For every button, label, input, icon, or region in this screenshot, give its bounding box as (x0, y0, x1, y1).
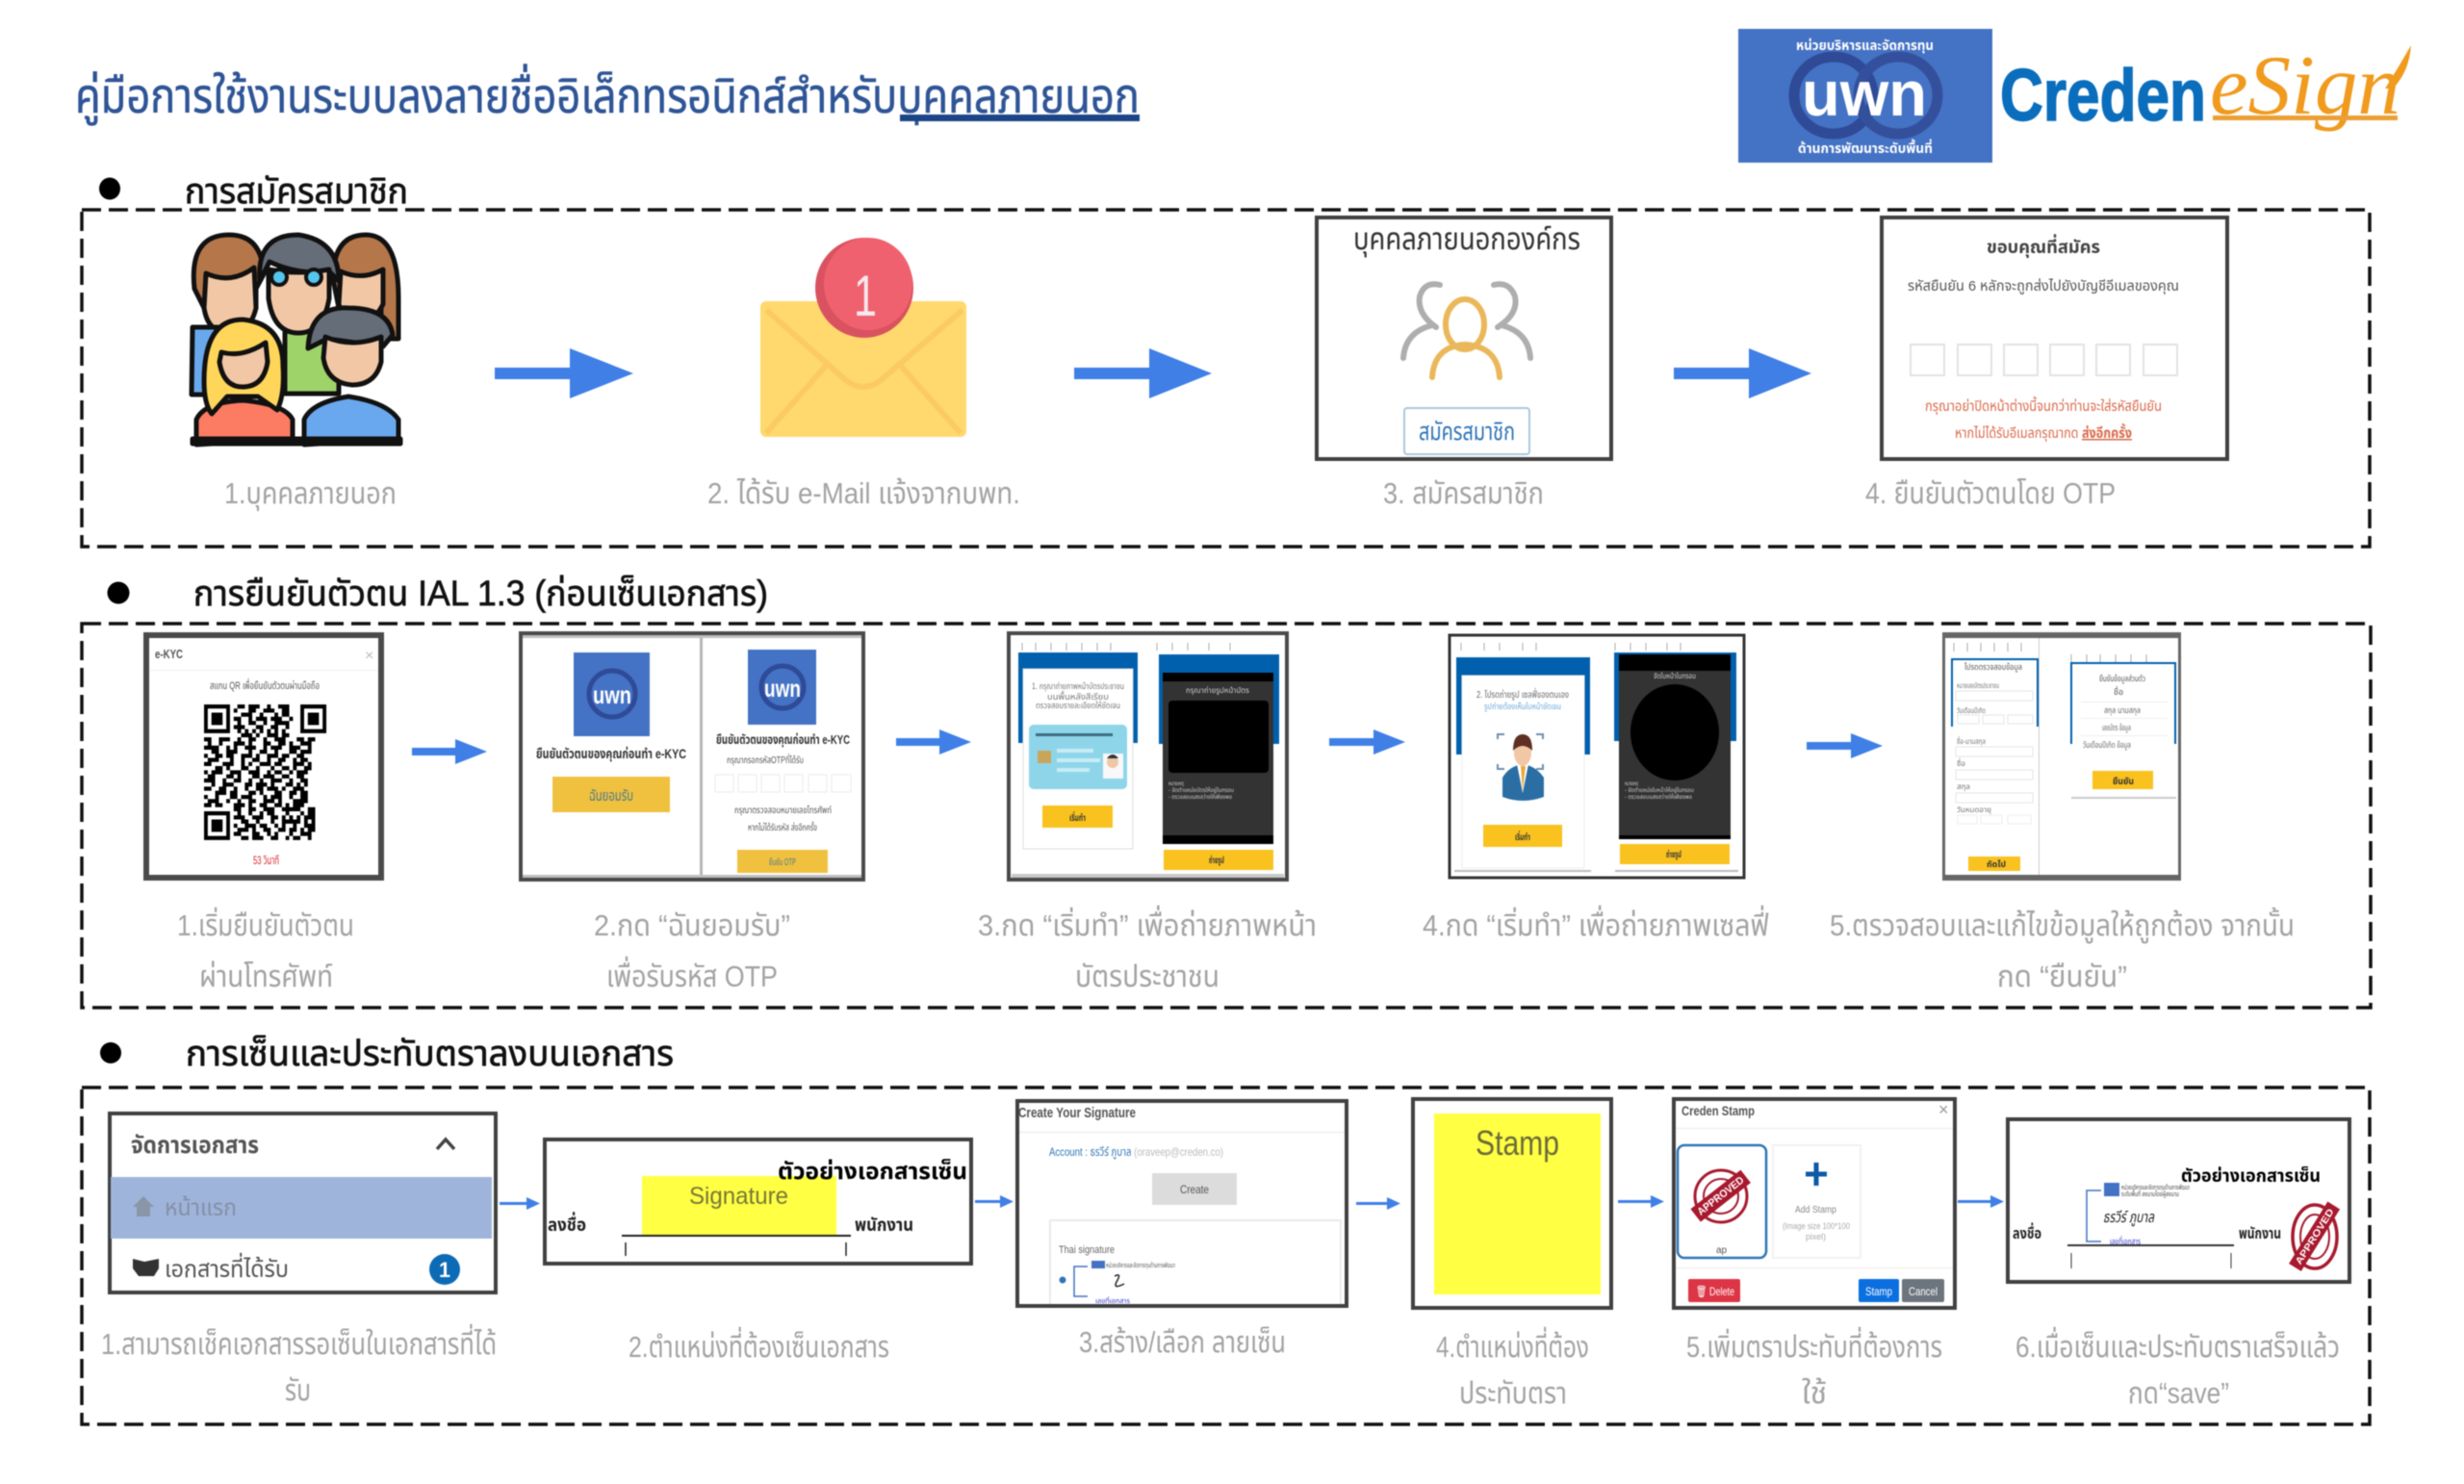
logo: Creden eSign: eSign (2210, 39, 2400, 133)
card: accept terms and OTP: ยืนยันตัวตนของคุณก่อนทำ e-KYC (716, 732, 850, 747)
stamp option (1678, 1145, 1766, 1258)
card: document menu: เอกสารที่ได้รับ (165, 1252, 289, 1283)
caption: 4. ยืนยันตัวตนโดย OTP (1865, 476, 2116, 510)
card: e-KYC QR: × (365, 648, 373, 664)
confirm screen (2071, 663, 2176, 799)
logo: UWN: หน่วยบริหารและจัดการทุน (1796, 38, 1934, 54)
caption (101, 1323, 497, 1407)
icon: envelope with notification (760, 238, 966, 437)
right phone screen: หมายเหตุ (1625, 781, 1638, 787)
card: signature position: ลงชื่อ (548, 1212, 586, 1236)
confirm screen: วันเดือนปีเกิด ข้อมูล (2083, 740, 2131, 751)
arrow (1074, 348, 1212, 398)
QR code (204, 704, 326, 840)
card: create signature: Create Your Signature (1018, 1105, 1136, 1121)
card: create signature (1017, 1101, 1347, 1306)
form screen: ถัดไป (1987, 859, 2006, 869)
arrow (1807, 733, 1883, 758)
arrow (1674, 348, 1811, 398)
right phone screen: - ตรวจสอบแสงสว่างให้เพียงพอ (1625, 794, 1693, 801)
left phone screen: รูปถ่ายต้องเห็นใบหน้าชัดเจน (1484, 702, 1561, 712)
form screen: ชื่อ (1957, 757, 1965, 768)
caption: 1.เริ่มยืนยันตัวตน (177, 907, 354, 942)
left phone screen: บนพื้นหลังสีเรียบ (1047, 690, 1109, 702)
card: signed and stamped document: ธรวีร์ ภูบาล (2103, 1210, 2155, 1227)
right phone screen: หมายเหตุ (1168, 781, 1184, 787)
arrow (1618, 1195, 1664, 1208)
card: OTP verification: ขอบคุณที่สมัคร (1987, 234, 2100, 258)
left phone screen: เริ่มทำ (1069, 811, 1086, 824)
mini logo (574, 652, 650, 736)
caption (177, 907, 354, 993)
card: document menu: หน้าแรก (165, 1195, 237, 1221)
section heading: identity verification: การยืนยันตัวตน IAL 1.3 (ก่อนเซ็นเอกสาร) (193, 574, 768, 613)
card: sign up (1317, 217, 1611, 459)
caption: ใช้ (1802, 1376, 1827, 1410)
card: OTP verification: หากไม่ได้รับอีเมลกรุณากด ส่งอีกครั้ง (1955, 423, 2132, 442)
icon: group of people (192, 235, 400, 445)
right phone screen: จัดใบหน้าในกรอบ (1654, 671, 1696, 680)
button: stamp (1859, 1279, 1899, 1302)
button (1404, 408, 1529, 454)
form screen: วันเดือนปีเกิด (1957, 705, 1986, 715)
title: คู่มือการใช้งานระบบลงลายชื่ออิเล็กทรอนิกส์สำหรับบุคคลภายนอก (75, 64, 1140, 125)
confirm screen: ยืนยันข้อมูลส่วนตัว (2099, 674, 2145, 684)
logo: UWN: uwn (1802, 58, 1927, 129)
card: OTP verification: กรุณาอย่าปิดหน้าต่างนี้จนกว่าท่านจะใส่รหัสยืนยัน (1925, 396, 2162, 415)
caption: 5.เพิ่มตราประทับที่ต้องการ (1686, 1326, 1942, 1364)
confirm screen: ยืนยัน (2113, 776, 2134, 787)
form screen: โปรดตรวจสอบข้อมูล (1964, 662, 2022, 673)
card: signed and stamped document: ตัวอย่างเอกสารเซ็น (2181, 1164, 2321, 1187)
card: signed and stamped document: ระดับพื้นที่ ลงนามโดยผู้ลงนาม (2121, 1189, 2179, 1198)
left phone screen: 2. โปรดถ่ายรูป เซลฟี่ของตนเอง (1476, 687, 1569, 701)
arrow (412, 739, 487, 764)
panel: identity verification (82, 624, 2371, 1008)
confirm screen: สกุล นามสกุล (2104, 705, 2141, 715)
card: accept terms and OTP (521, 633, 863, 880)
card: signature position (545, 1139, 971, 1264)
panel: membership (82, 210, 2370, 547)
button (552, 777, 670, 812)
icon: person with face frame (1498, 734, 1544, 801)
form screen: หมายเลขบัตรประชาชน (1957, 681, 1999, 690)
arrow (975, 1195, 1014, 1208)
button: สมัครสมาชิก (1419, 417, 1515, 446)
right phone screen: - ตรวจสอบแสงสว่างให้เพียงพอ (1168, 794, 1232, 801)
card: signature position: Signature (689, 1183, 788, 1210)
card: OTP verification: รหัสยืนยัน 6 หลักจะถูกส่งไปยังบัญชีอีเมลของคุณ (1908, 277, 2179, 294)
right phone screen: - จัดตำแหน่งใบหน้าให้อยู่ในกรอบ (1625, 787, 1694, 794)
right phone screen: ถ่ายรูป (1209, 854, 1224, 866)
card: e-KYC QR: สแกน QR เพื่อยืนยันตัวตนผ่านมือถือ (210, 678, 320, 692)
stamp: APPROVED (2294, 1207, 2337, 1267)
caption: 2.กด “ฉันยอมรับ” (594, 908, 790, 942)
button: ยืนยัน OTP (769, 857, 796, 868)
caption: กด “ยืนยัน” (1997, 959, 2127, 993)
card: signature position: พนักงาน (855, 1215, 913, 1236)
card: document menu (110, 1113, 496, 1292)
add stamp option: (Image size 100*100 (1783, 1221, 1850, 1231)
card: OTP verification (1882, 217, 2227, 459)
caption (594, 908, 790, 993)
badge (429, 1254, 460, 1285)
form screen: สกุล (1957, 782, 1970, 791)
add stamp option: Add Stamp (1795, 1205, 1836, 1215)
button (737, 850, 828, 873)
caption: กด“save” (2128, 1376, 2229, 1410)
card: add stamp: × (1938, 1100, 1949, 1119)
card: create signature: Create (1180, 1183, 1209, 1196)
caption: 6.เมื่อเซ็นและประทับตราเสร็จแล้ว (2015, 1326, 2340, 1364)
ID card illustration (1029, 725, 1127, 789)
card: signed and stamped document (2008, 1119, 2349, 1282)
card: create signature: Thai signature (1059, 1244, 1115, 1256)
form screen: ชื่อ-นามสกุล (1957, 735, 1986, 746)
mini signature: หน่วยบริหารและจัดการทุนด้านการพัฒนา (1106, 1261, 1175, 1270)
caption: ประทับตรา (1459, 1376, 1567, 1410)
section heading: membership: การสมัครสมาชิก (185, 171, 408, 211)
caption: 4.ตำแหน่งที่ต้อง (1436, 1326, 1589, 1364)
button: delete: 🗑 Delete (1696, 1285, 1734, 1298)
arrow (1329, 729, 1405, 755)
section heading: sign and stamp: การเซ็นและประทับตราลงบนเอกสาร (186, 1034, 674, 1073)
caption: 3.สร้าง/เลือก ลายเซ็น (1079, 1325, 1286, 1359)
logo: Creden eSign: Creden (2000, 55, 2206, 137)
confirm screen: ชื่อ (2114, 685, 2123, 697)
badge: 1 (439, 1258, 450, 1282)
stamp option: APPROVED (1695, 1174, 1747, 1218)
logo: Creden eSign (2000, 39, 2411, 137)
card: review data (1942, 632, 2181, 881)
add stamp option (1773, 1145, 1861, 1258)
button: delete (1688, 1279, 1740, 1302)
caption: บัตรประชาชน (1075, 959, 1219, 993)
card: document menu: จัดการเอกสาร (131, 1132, 259, 1159)
arrow (1958, 1195, 2004, 1208)
caption: เพื่อรับรหัส OTP (606, 956, 778, 993)
arrow (1356, 1197, 1400, 1210)
caption: 4.กด “เริ่มทำ” เพื่อถ่ายภาพเซลฟี่ (1423, 905, 1769, 942)
left phone screen (1456, 657, 1590, 868)
caption (1436, 1326, 1589, 1410)
right phone screen: - จัดตำแหน่งบัตรให้อยู่ในกรอบ (1168, 787, 1234, 794)
card: stamp position (1413, 1099, 1611, 1308)
right phone screen (1159, 654, 1279, 870)
card: signature position: ตัวอย่างเอกสารเซ็น (778, 1158, 967, 1185)
panel: sign and stamp (82, 1087, 2370, 1424)
card: accept terms and OTP: ยืนยันตัวตนของคุณก่อนทำ e-KYC (536, 746, 686, 762)
left phone screen: 1. กรุณาถ่ายภาพหน้าบัตรประชาชน (1032, 681, 1124, 691)
card: ID card photo (1009, 633, 1287, 880)
card: add stamp (1674, 1099, 1955, 1308)
card: signed and stamped document: ลงชื่อ (2013, 1222, 2041, 1242)
stamp option: ap (1716, 1245, 1728, 1256)
card: accept terms and OTP: กรุณากรอกรหัสOTPที่ได้รับ (727, 753, 804, 766)
card: signed and stamped document: เลขที่เอกสาร (2110, 1235, 2141, 1246)
logo: UWN (1738, 29, 1992, 163)
card: e-KYC QR (146, 635, 381, 878)
caption: 1.สามารถเช็คเอกสารรอเซ็นในเอกสารที่ได้ (101, 1323, 497, 1361)
card: e-KYC QR: e-KYC (155, 647, 183, 661)
right phone screen: กรุณาถ่ายรูปหน้าบัตร (1186, 685, 1249, 696)
caption: 3. สมัครสมาชิก (1383, 476, 1544, 510)
arrow (495, 348, 633, 398)
mini logo (748, 650, 816, 725)
icon: home (133, 1196, 154, 1216)
card: accept terms and OTP: หากไม่ได้รับรหัส ส่งอีกครั้ง (748, 821, 817, 833)
caption: 1.บุคคลภายนอก (224, 476, 397, 511)
mini logo: uwn (593, 680, 631, 709)
card: e-KYC QR: 53 วินาที (253, 854, 279, 867)
arrow (500, 1197, 540, 1210)
caption: 5.ตรวจสอบและแก้ไขข้อมูลให้ถูกต้อง จากนั้น (1830, 907, 2295, 943)
logo: UWN: ด้านการพัฒนาระดับพื้นที่ (1798, 139, 1933, 156)
caption: 2.ตำแหน่งที่ต้องเซ็นเอกสาร (629, 1326, 889, 1364)
icon: inbox (133, 1259, 159, 1276)
right phone screen (1614, 652, 1736, 864)
caption: รับ (285, 1373, 311, 1407)
add stamp option: pixel) (1806, 1232, 1826, 1241)
mini signature (1074, 1261, 1175, 1305)
caption: 3.กด “เริ่มทำ” เพื่อถ่ายภาพหน้า (978, 905, 1317, 942)
card: add stamp: Creden Stamp (1681, 1103, 1755, 1118)
left phone screen: เริ่มทำ (1515, 831, 1530, 843)
confirm screen: เลขบัตร ข้อมูล (2102, 723, 2131, 733)
mini logo: uwn (764, 676, 801, 703)
card: signed and stamped document: พนักงาน (2239, 1226, 2281, 1242)
caption (2015, 1326, 2340, 1410)
left phone screen: ตรวจสอบรายละเอียดให้ชัดเจน (1036, 701, 1120, 710)
caption: ผ่านโทรศัพท์ (199, 959, 333, 993)
left phone screen (1018, 652, 1138, 849)
card: stamp position: Stamp (1476, 1123, 1559, 1163)
icon: envelope with notification: 1 (854, 264, 877, 328)
form screen (1952, 659, 2038, 871)
card: signed and stamped document: หน่วยบริหารและจัดการทุนด้านการพัฒนา (2121, 1183, 2190, 1192)
icon: people outline (1403, 284, 1530, 377)
arrow (896, 729, 971, 755)
mini signature: เลขที่เอกสาร (1095, 1295, 1131, 1305)
right phone screen: ถ่ายรูป (1666, 848, 1681, 860)
caption (1686, 1326, 1942, 1410)
caption (1830, 907, 2295, 993)
card: create signature: Account : ธรวีร์ ภูบาล (oraveep@creden.co) (1049, 1145, 1223, 1159)
button: cancel: Cancel (1909, 1285, 1938, 1298)
card: sign up: บุคคลภายนอกองค์กร (1353, 221, 1580, 257)
card: selfie photo (1450, 635, 1744, 878)
button: ฉันยอมรับ (589, 788, 633, 805)
form screen: วันหมดอายุ (1957, 806, 1991, 814)
button: cancel (1902, 1279, 1944, 1302)
button: stamp: Stamp (1865, 1285, 1892, 1298)
stamp (2289, 1202, 2340, 1271)
caption: 2. ได้รับ e-Mail แจ้งจากบพท. (707, 476, 1020, 510)
caption (978, 905, 1317, 993)
card: accept terms and OTP: กรุณาตรวจสอบหมายเลขโทรศัพท์ (734, 805, 832, 816)
